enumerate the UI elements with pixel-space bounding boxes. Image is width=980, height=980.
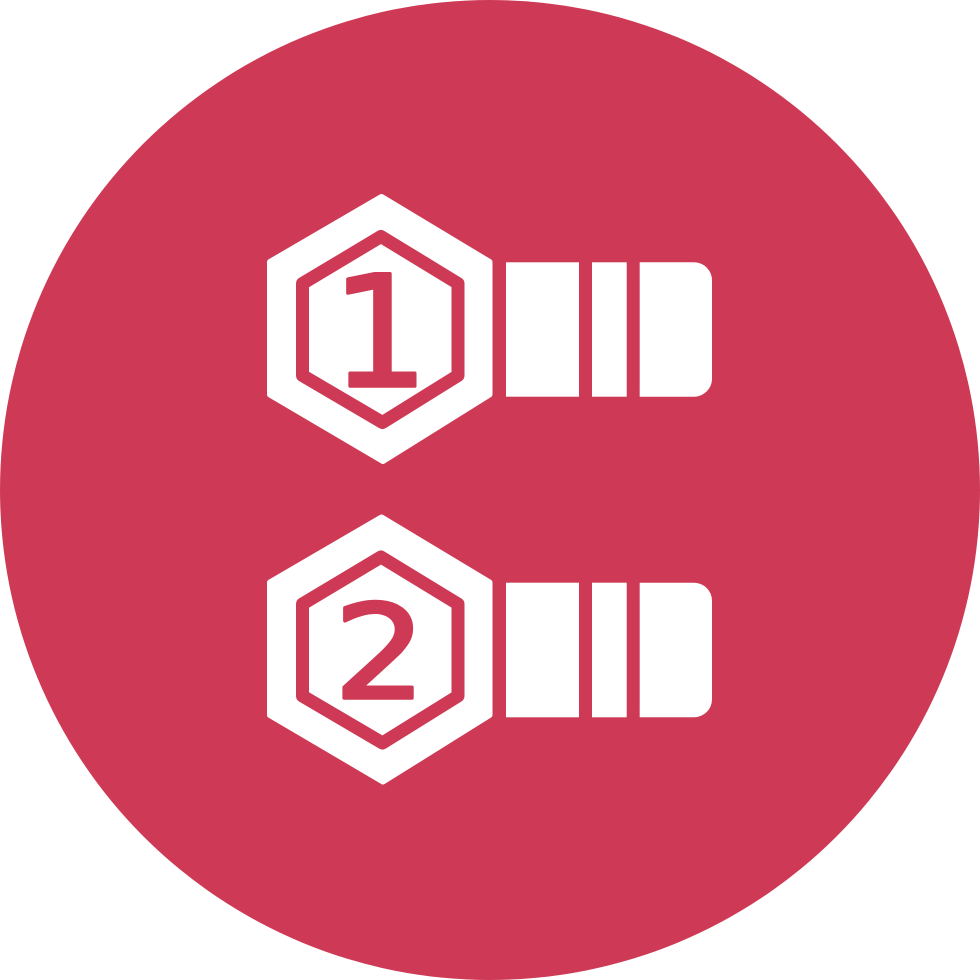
bar segment: middle <box>592 583 627 717</box>
bar segment: right rounded <box>640 262 712 397</box>
icon: outer white hexagon 2 <box>270 518 490 782</box>
bar segment: middle <box>592 262 627 397</box>
list item 1 <box>270 197 712 461</box>
icon: outer white hexagon 1 <box>270 197 490 461</box>
bar segment: left <box>506 583 579 717</box>
icon: inner red hexagon ring 1 <box>302 236 458 422</box>
bar segment: right rounded <box>640 583 712 717</box>
number 1: 1 <box>331 244 429 423</box>
bar segment: left <box>506 262 579 397</box>
number 2: 2 <box>334 577 426 729</box>
bar segments 1 <box>506 262 712 397</box>
bar segments 2 <box>506 583 712 717</box>
list item 2 <box>270 518 712 782</box>
icon: inner red hexagon ring 2 <box>302 557 458 743</box>
